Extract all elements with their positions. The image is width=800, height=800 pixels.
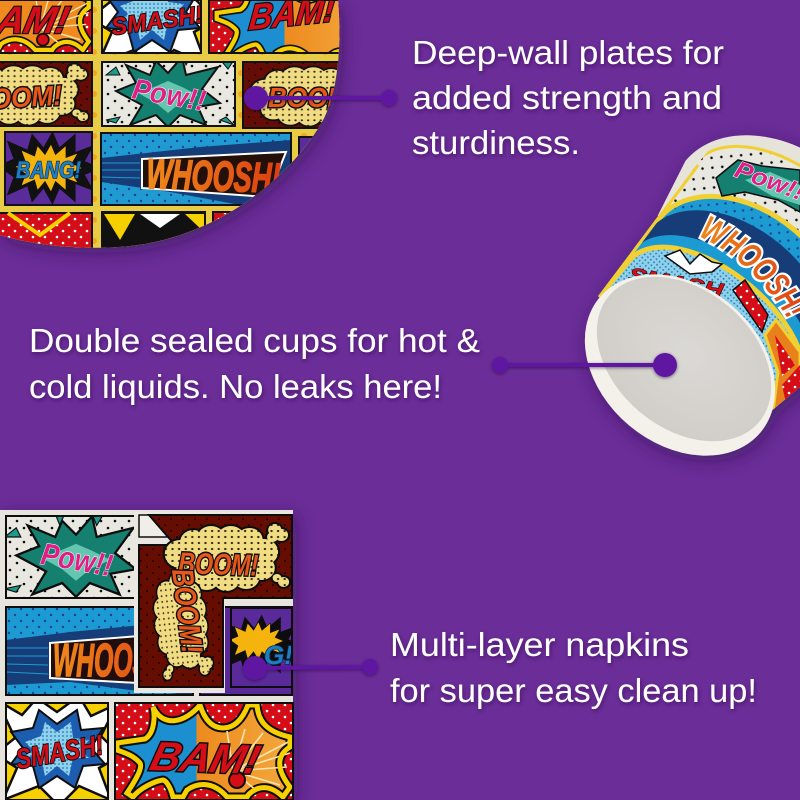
panel: plate POW: [103, 63, 234, 125]
fold POW fragment: [139, 515, 168, 537]
text: napkins: Multi-layer napkins: [390, 626, 689, 663]
panel: napkin POW: [7, 517, 134, 597]
fold: upper napkin layer: BOOM!: [178, 547, 259, 583]
text: plates: added strength and: [412, 79, 722, 116]
cup rim: [647, 92, 800, 367]
connector: plates: [244, 86, 397, 110]
text: cups: Double sealed cups for hot &: [29, 322, 480, 359]
text: cups: cold liquids. No leaks here!: [29, 368, 442, 405]
text: napkins: for super easy clean up!: [390, 672, 757, 709]
panel: plate SMASH: [103, 1, 200, 52]
cup: comic-pattern paper cup seen from the base: [579, 132, 800, 470]
panel: plate SMASH: SMASH!: [110, 1, 205, 41]
fold: upper napkin layer: [134, 512, 302, 693]
panel: napkin WHOOSH: [6, 607, 193, 695]
cup POW panel: Pow!!: [731, 156, 800, 206]
callout: plates: [244, 34, 724, 161]
panel: plate BANG: [6, 133, 91, 204]
text: plates: Deep-wall plates for: [412, 34, 724, 71]
text: cups: [29, 322, 480, 405]
panel: plate BOOM left: [0, 62, 92, 126]
panel: napkin WHOOSH: WHOOSH!: [53, 634, 175, 686]
text: napkins: [390, 626, 757, 709]
callout: napkins: [243, 626, 757, 709]
panel: plate WHOOSH: WHOOSH!: [146, 150, 281, 202]
connector: cups: [492, 353, 677, 377]
panel: plate BAM left: [0, 0, 92, 53]
cup wall: [598, 144, 800, 414]
callout: cups: [29, 322, 677, 405]
panel: plate BAM right: [210, 0, 340, 53]
panel: napkin purple strip: [200, 607, 292, 695]
cup SMASH panel: SMASH: [627, 264, 725, 303]
cup SMASH panel: [628, 249, 726, 296]
panel: plate BOOM right: BOOM!: [268, 82, 358, 113]
panel: plate BOOM right: [244, 62, 338, 128]
fold: upper napkin layer: BOOM!: [165, 567, 208, 655]
panel: plate purple fragment: [298, 136, 313, 156]
panel: plate bottom row: [0, 211, 232, 248]
fold BANG panel: [232, 614, 291, 674]
fold BOOM panel: [139, 515, 292, 687]
fold BANG panel: G!: [264, 640, 293, 670]
panel: napkin POW: Pow!!: [38, 536, 115, 583]
panel: napkin BAM: [115, 703, 293, 800]
panel: napkin SMASH: SMASH!: [13, 729, 106, 775]
connector: napkins: [243, 656, 378, 680]
panel: plate WHOOSH: [101, 133, 291, 205]
text: plates: [412, 34, 724, 161]
cup base: [549, 237, 800, 493]
panel: plate BANG: BANG!: [16, 157, 81, 184]
text: plates: sturdiness.: [412, 124, 580, 161]
panel: napkin SMASH: [7, 704, 107, 799]
panel: plate POW: Pow!!: [130, 74, 208, 118]
cup red and orange panels: [733, 280, 800, 420]
plate: comic-pattern deep-wall plate: [0, 0, 369, 253]
panel: napkin BAM: BAM!: [146, 733, 265, 783]
napkin: folded comic-pattern napkin: [0, 510, 302, 800]
